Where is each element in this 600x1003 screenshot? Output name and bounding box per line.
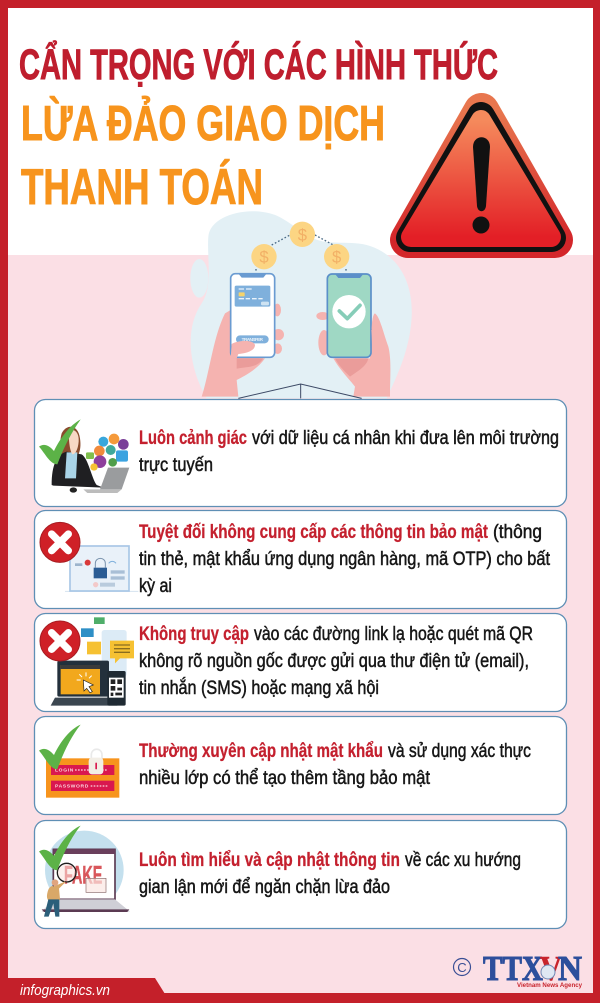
- text block: card 3: tin nhắn (SMS) hoặc mạng xã hội: [139, 677, 379, 699]
- title: [19, 40, 498, 215]
- text block: card 2: Tuyệt đối không cung cấp các thông tin bảo mật: [139, 522, 489, 543]
- hero illustration: phones transferring money: [190, 211, 412, 398]
- icon: woman at laptop with social media and check mark: [39, 419, 129, 493]
- logo: TTXVN Vietnam News Agency: TTX: [483, 949, 543, 988]
- title: THANH TOÁN: [21, 159, 263, 215]
- icon: laptop, phone QR code, envelopes and red cross: [40, 617, 134, 706]
- text block: card 4: nhiều lớp có thể tạo thêm tầng bảo mật: [139, 768, 431, 789]
- icon: monitor with lock and red cross: [40, 522, 138, 591]
- logo: TTXVN Vietnam News Agency: Vietnam News Agency: [517, 982, 582, 989]
- text block: card 1: Luôn cảnh giác: [139, 428, 247, 449]
- text block: card 3: Không truy cập: [139, 624, 249, 645]
- text block: card 4: và sử dụng xác thực: [388, 741, 531, 762]
- text block: card 2: kỳ ai: [139, 576, 172, 597]
- icon: fake website on laptop, person with magnifier, check mark: [39, 826, 130, 917]
- pink body background: [0, 255, 600, 1003]
- text block: card 3: không rõ nguồn gốc được gửi qua thư điện tử (email),: [139, 651, 529, 672]
- logo: TTXVN Vietnam News Agency: [454, 949, 582, 989]
- text block: card 4: [139, 741, 531, 789]
- icon: login form with padlock and check mark: LOGIN: [55, 768, 74, 774]
- text block: card 1: trực tuyến: [139, 455, 213, 476]
- text block: card 5: Luôn tìm hiểu và cập nhật thông tin: [139, 850, 400, 871]
- icon: login form with padlock and check mark: PASSWORD: [55, 784, 89, 790]
- logo: TTXVN Vietnam News Agency: C: [457, 960, 467, 975]
- text block: card 3: [139, 624, 533, 699]
- hero illustration: phones transferring money: $: [298, 225, 307, 244]
- icon: fake website on laptop, person with magnifier, check mark: FAKE: [64, 861, 102, 889]
- text block: card 5: gian lận mới để ngăn chặn lừa đảo: [139, 877, 390, 898]
- white header background: [0, 0, 600, 255]
- logo: TTXVN Vietnam News Agency: V: [540, 949, 562, 988]
- text block: card 3: vào các đường link lạ hoặc quét mã QR: [254, 624, 533, 645]
- text block: card 1: [139, 428, 559, 476]
- panel: card 5 stay informed on fraud trends: [34, 820, 566, 928]
- hero illustration: phones transferring money: TRANSFER: [242, 337, 264, 342]
- panel: card 1 stay vigilant: [34, 400, 566, 506]
- text block: card 4: Thường xuyên cập nhật mật khẩu: [139, 741, 383, 762]
- footer tab: infographics.vn: infographics.vn: [20, 983, 110, 999]
- text block: card 5: về các xu hướng: [405, 850, 521, 871]
- text block: card 2: (thông: [493, 522, 542, 543]
- hero illustration: phones transferring money: $: [332, 248, 341, 267]
- text block: card 2: [139, 522, 551, 597]
- hero illustration: phones transferring money: $: [259, 248, 269, 267]
- panel: card 4 update passwords: [34, 716, 566, 814]
- footer tab: infographics.vn: [0, 978, 165, 999]
- panel: card 3 do not open strange links: [34, 614, 566, 712]
- title: LỪA ĐẢO GIAO DỊCH: [21, 96, 385, 151]
- icon: warning triangle: [408, 111, 555, 240]
- icon: login form with padlock and check mark: [39, 725, 119, 798]
- text block: card 5: [139, 850, 521, 898]
- panel: card 2 never share security information: [34, 510, 566, 608]
- logo: TTXVN Vietnam News Agency: N: [558, 949, 582, 988]
